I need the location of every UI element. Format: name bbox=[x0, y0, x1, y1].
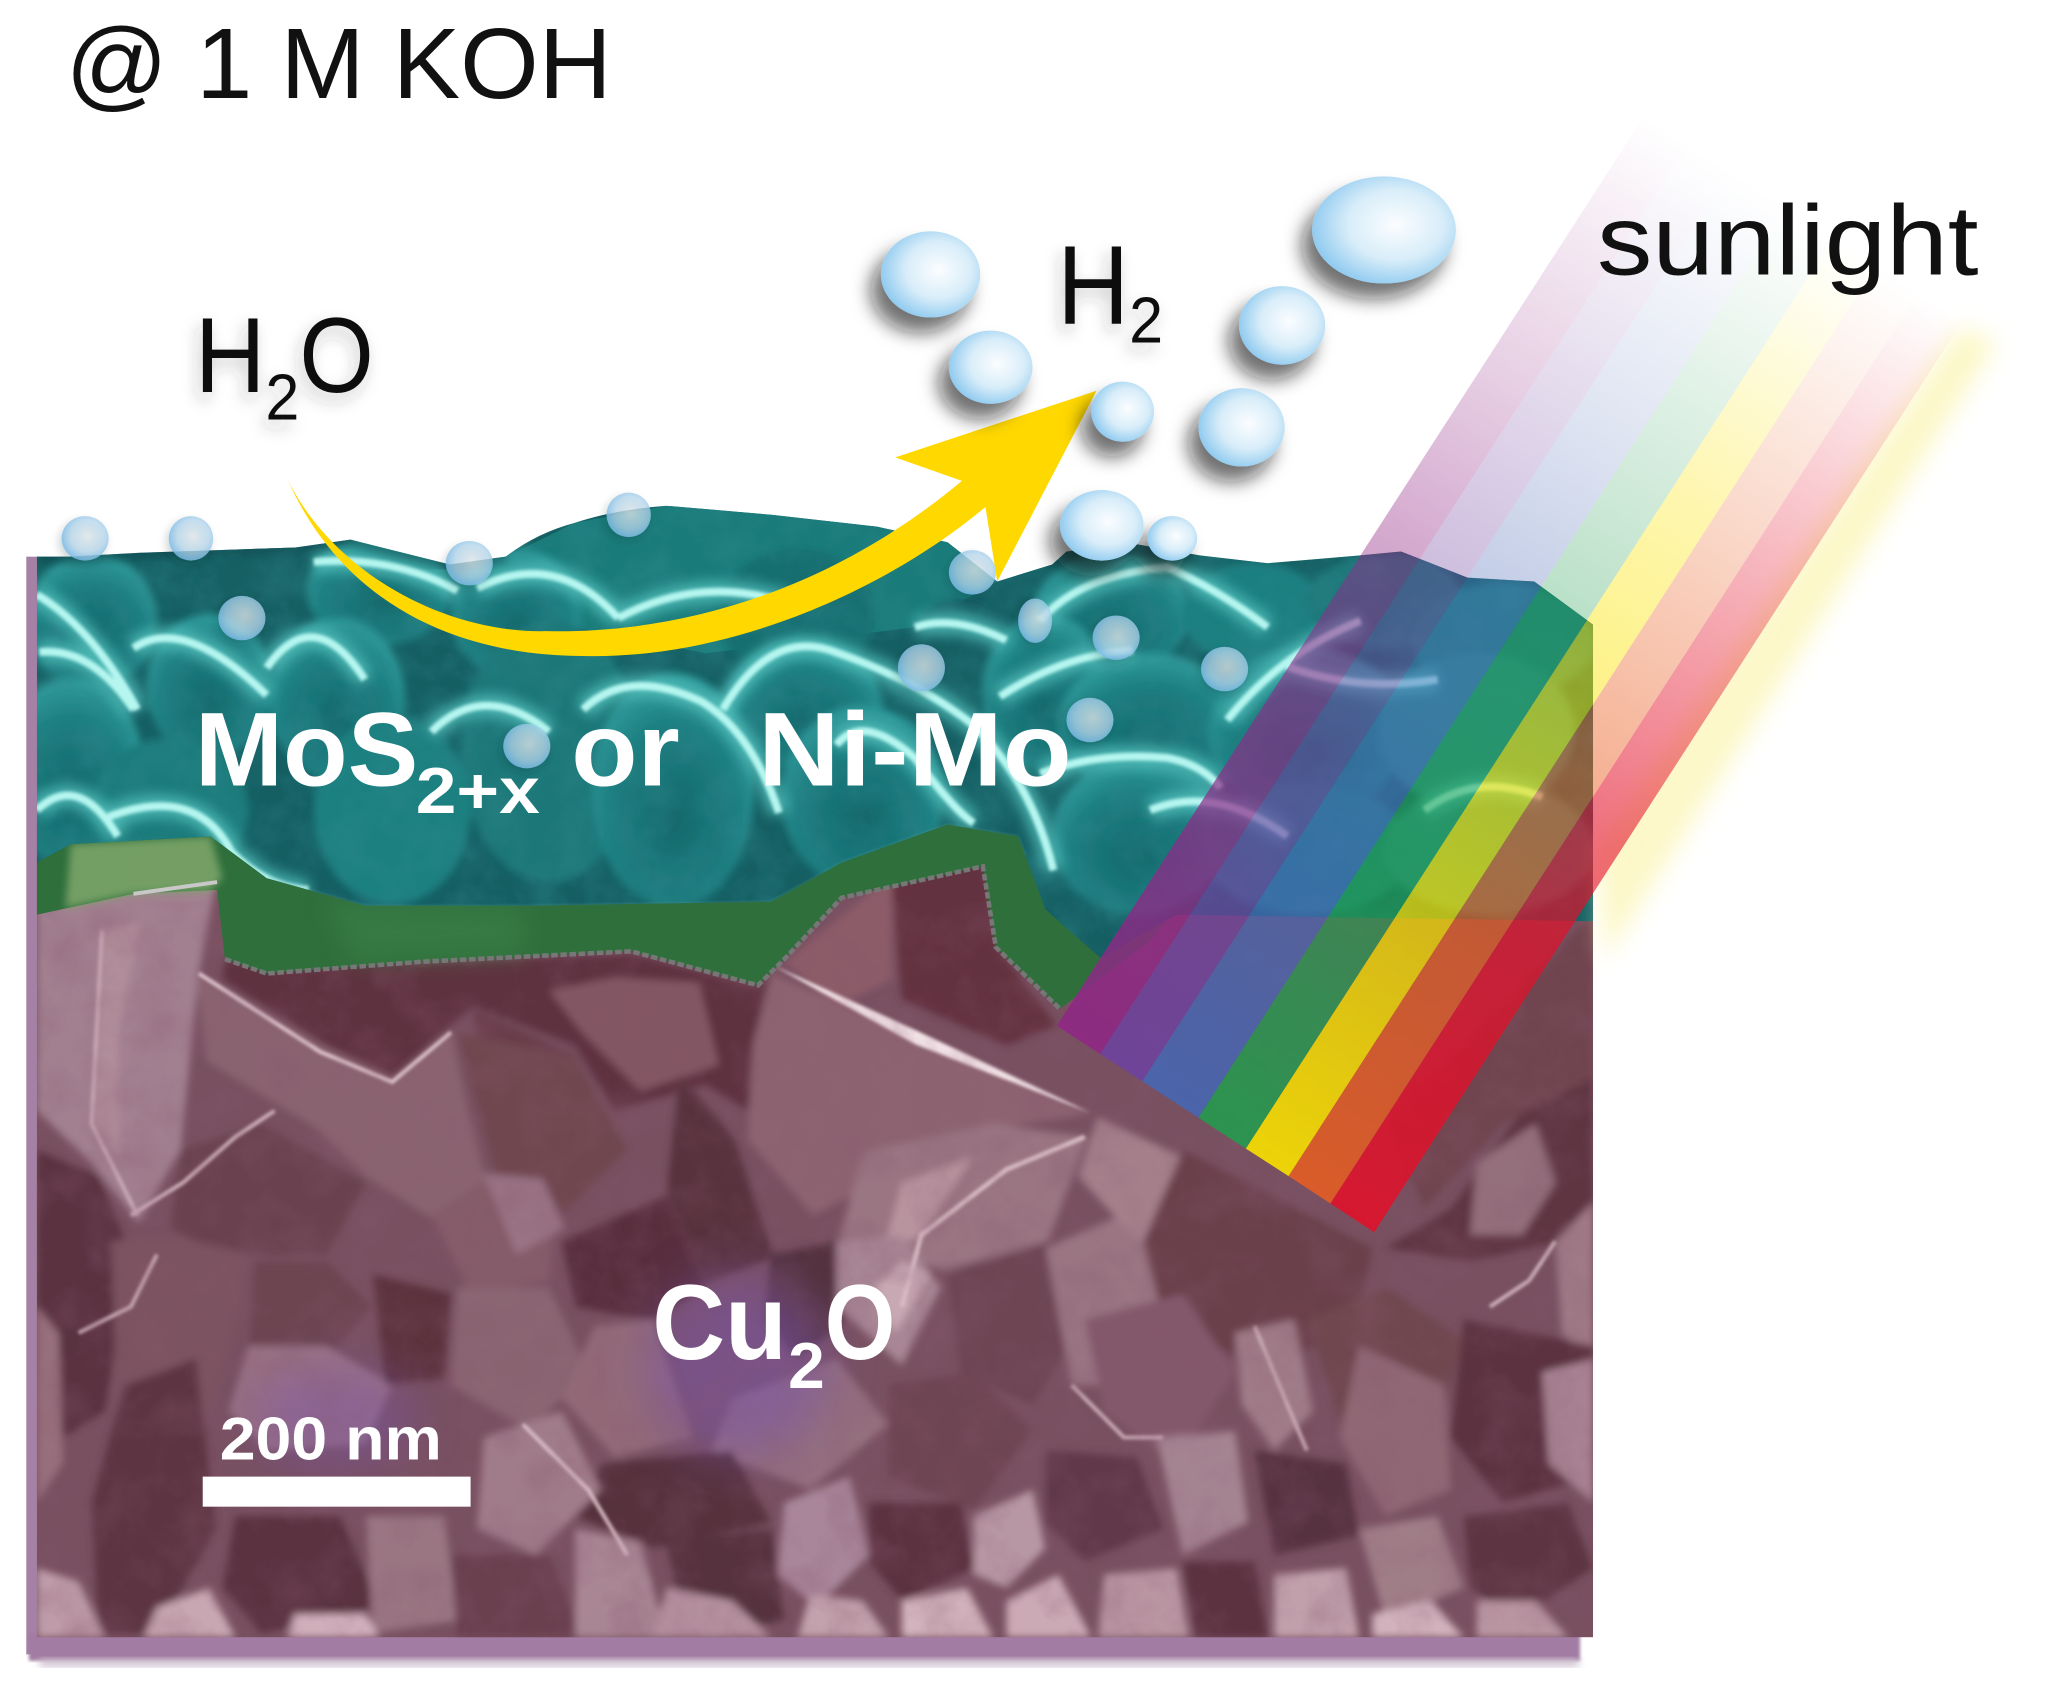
label: Cu2O: 2 bbox=[788, 1329, 825, 1402]
label: H2: H bbox=[1057, 222, 1129, 348]
label: sunlight: sunlight bbox=[1597, 185, 1979, 296]
layer: MoS2+x or Ni-Mo catalyst bbox=[0, 497, 1594, 967]
purple tints near labels bbox=[647, 1274, 830, 1457]
label: Cu2O: Cu bbox=[652, 1262, 787, 1382]
reaction arrow bbox=[288, 391, 1097, 656]
label: H2O: 2 bbox=[265, 360, 299, 433]
beam inside film bbox=[1267, 552, 1593, 921]
label: Cu2O: O bbox=[825, 1262, 895, 1382]
bright grain rims bbox=[37, 561, 1542, 890]
label: H2: 2 bbox=[1129, 283, 1163, 356]
surface shadow under the white edge bbox=[37, 540, 506, 565]
label: H2O: O bbox=[299, 295, 374, 415]
title: electrolyte: @ 1 M KOH bbox=[66, 8, 612, 120]
rainbow beam bbox=[1057, 115, 1962, 1232]
label: H2O bbox=[195, 295, 374, 433]
label: catalyst name: Ni-Mo bbox=[758, 691, 1072, 808]
sunlight glow bbox=[1597, 327, 1997, 960]
scale bar: 200 nm bbox=[203, 1406, 471, 1507]
layer: Cu2O substrate bbox=[37, 823, 1593, 1637]
label: catalyst name bbox=[195, 691, 1072, 827]
label: catalyst name: 2+x bbox=[416, 754, 540, 827]
label: catalyst name: or bbox=[571, 691, 680, 808]
panel shadow bbox=[26, 557, 1580, 1666]
label: Cu2O bbox=[652, 1262, 895, 1402]
scale bar: 200 nm: 200 nm bbox=[220, 1406, 442, 1473]
small water droplets bbox=[62, 493, 1248, 768]
label: catalyst name: MoS bbox=[195, 691, 418, 808]
hydrogen bubbles bbox=[881, 176, 1456, 561]
layer: green interlayer bbox=[37, 817, 1176, 1009]
catalyst grains bbox=[0, 536, 1594, 915]
label: H2O: H bbox=[195, 295, 265, 415]
